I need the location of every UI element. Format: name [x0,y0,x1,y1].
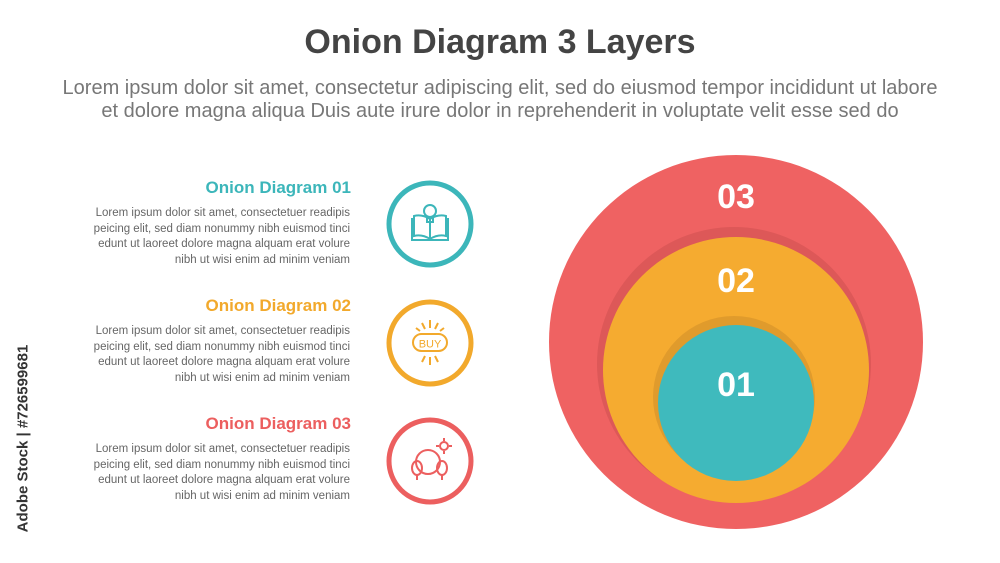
onion layer 2: 02 [717,262,755,300]
onion layer 3: 03 [717,178,755,216]
icon: book [389,183,471,265]
side text: Adobe Stock | #726599681 [14,345,32,532]
subtitle [63,77,937,122]
icon: buy: BUY [419,338,442,350]
icon: buy [389,302,471,384]
item 1 text: Lorem ipsum dolor sit amet, consectetuer readipis peicing elit, sed diam nonummy nibh euismod tinci edunt ut laoreet dolore magna alquam erat volure nibh ut wisi enim ad minim veniam [94,207,350,266]
item 1 text: Onion Diagram 01 [206,178,351,197]
subtitle: et dolore magna aliqua Duis aute irure dolor in reprehenderit in voluptate velit esse sed do [101,100,899,122]
onion layer 2 [597,227,871,503]
item 2 text: Lorem ipsum dolor sit amet, consectetuer readipis peicing elit, sed diam nonummy nibh euismod tinci edunt ut laoreet dolore magna alquam erat volure nibh ut wisi enim ad minim veniam [94,325,350,384]
item 3 text: Lorem ipsum dolor sit amet, consectetuer readipis peicing elit, sed diam nonummy nibh euismod tinci edunt ut laoreet dolore magna alquam erat volure nibh ut wisi enim ad minim veniam [94,443,350,502]
onion layer 3 [549,155,923,529]
onion layer 1 [653,316,815,481]
item 3 text: Onion Diagram 03 [206,414,351,433]
title: Onion Diagram 3 Layers [304,23,696,61]
item 3 text [94,414,351,502]
subtitle: Lorem ipsum dolor sit amet, consectetur adipiscing elit, sed do eiusmod tempor incididunt ut labore [63,77,937,99]
item 1 text [94,178,351,266]
icon: earth [389,420,471,502]
item 2 text: Onion Diagram 02 [206,296,351,315]
item 2 text [94,296,351,384]
onion layer 1: 01 [717,366,755,404]
